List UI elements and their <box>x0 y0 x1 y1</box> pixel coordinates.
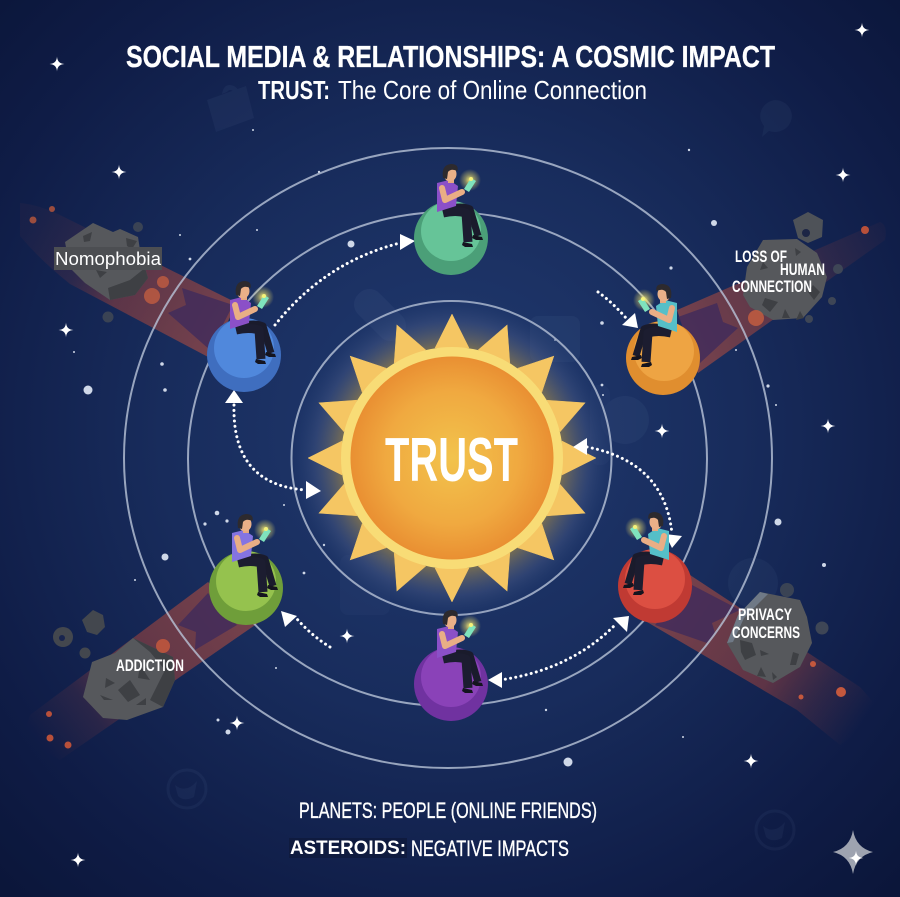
sun rays <box>308 314 596 602</box>
sun: trust <box>294 300 610 616</box>
asteroid: addiction <box>46 610 184 748</box>
asteroid label: loss of human connection: HUMAN <box>780 260 825 279</box>
planet: orange person <box>626 284 700 395</box>
planet: green person <box>414 164 488 275</box>
faint social media icons <box>168 85 794 849</box>
planet: lime person <box>209 514 283 625</box>
comet tail: nomophobia <box>20 203 237 358</box>
asteroid label: privacy concerns <box>732 605 800 642</box>
comet tail: loss of human connection <box>677 222 886 373</box>
dotted arrows between planets <box>234 243 672 680</box>
asteroid label: loss of human connection <box>732 247 825 296</box>
asteroid: loss of human connection <box>732 212 869 326</box>
sun label: TRUST <box>385 426 518 495</box>
asteroid: nomophobia <box>30 206 169 322</box>
subtitle: The Core of Online Connection <box>338 75 647 105</box>
asteroid label: privacy concerns: CONCERNS <box>732 623 800 642</box>
icon: large sparkle <box>833 830 873 874</box>
asteroid label: loss of human connection: CONNECTION <box>732 277 812 296</box>
legend: asteroids <box>289 836 569 861</box>
asteroid: privacy concerns <box>727 583 846 700</box>
asteroid label: addiction: ADDICTION <box>116 656 184 675</box>
legend: planets: PLANETS: PEOPLE (ONLINE FRIENDS) <box>299 798 597 823</box>
comet tail: privacy concerns <box>647 575 885 745</box>
comet tail: addiction <box>22 582 258 760</box>
planet: blue person <box>207 281 281 392</box>
asteroid label: loss of human connection: LOSS OF <box>735 247 787 266</box>
planet: purple person <box>414 610 488 721</box>
asteroid label: nomophobia: Nomophobia <box>55 248 162 269</box>
planet: red person <box>618 512 692 623</box>
asteroid label: privacy concerns: PRIVACY <box>738 605 792 624</box>
subtitle: TRUST: <box>258 75 330 105</box>
legend: asteroids: ASTEROIDS: <box>290 837 406 859</box>
orbit rings <box>124 148 772 768</box>
arrowheads <box>225 234 682 688</box>
legend: asteroids: NEGATIVE IMPACTS <box>411 836 569 861</box>
